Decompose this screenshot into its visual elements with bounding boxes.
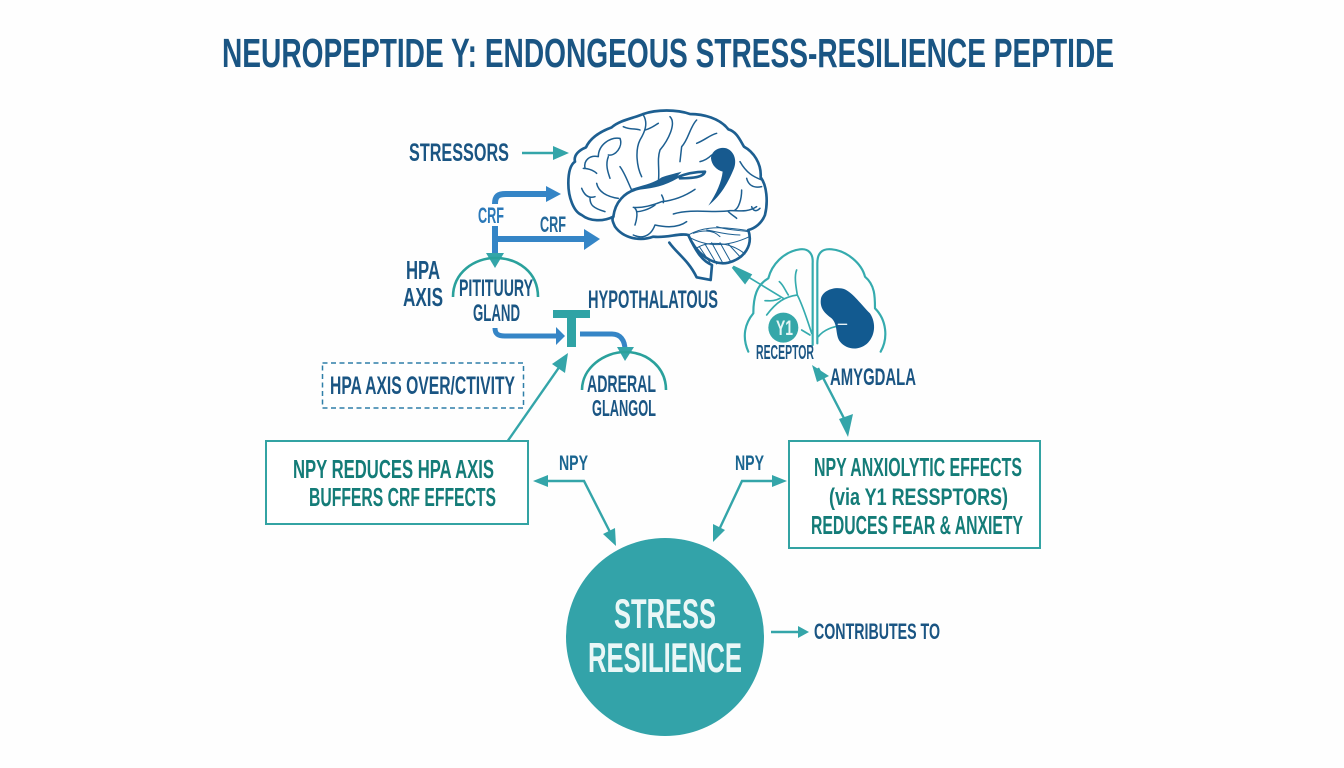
arrow: CRF upper branch (495, 186, 561, 204)
adrenal gland: ADRERAL (587, 371, 656, 398)
panel: NPY anxiolytic effects: (via Y1 RESSPTORS) (829, 484, 1008, 511)
pituitary gland (453, 258, 538, 327)
brain outline (568, 110, 767, 263)
arrow: right double elbow (713, 475, 787, 542)
HPA axis label: AXIS (403, 282, 443, 312)
branches (765, 270, 847, 337)
icon: amygdala (745, 249, 885, 352)
label: contributes to: CONTRIBUTES TO (814, 619, 940, 644)
right hemisphere (817, 249, 885, 352)
adrenal gland (582, 352, 666, 421)
panel: NPY reduces HPA axis: NPY REDUCES HPA AXIS (293, 454, 494, 484)
panel: NPY reduces HPA axis (266, 441, 528, 524)
arrow: contributes to (771, 626, 809, 638)
label: CRF left: CRF (478, 203, 504, 228)
arrow: stressors to brain (522, 146, 569, 160)
panel: NPY anxiolytic effects (789, 441, 1040, 548)
panel: NPY reduces HPA axis: BUFFERS CRF EFFECTS (309, 482, 496, 512)
arrow: left double elbow (533, 475, 616, 546)
panel: NPY anxiolytic effects: REDUCES FEAR & ANXIETY (811, 510, 1023, 540)
label: NPY right: NPY (735, 452, 764, 475)
inhibition T symbol (553, 310, 590, 347)
cerebellum folds (688, 227, 749, 264)
gyri (582, 115, 762, 237)
stressors label: STRESSORS (409, 139, 509, 167)
callout: HPA axis overactivity: HPA AXIS OVER/CTIVITY (330, 372, 515, 400)
dark fissure (630, 172, 682, 189)
arrow: pituitary to inhibition (495, 327, 565, 345)
Y1 circle (768, 313, 798, 343)
panel: NPY anxiolytic effects: NPY ANXIOLYTIC EFFECTS (814, 452, 1022, 482)
temporal lobe (613, 172, 705, 217)
label: NPY left: NPY (559, 452, 588, 475)
arrow: CRF lower branch and down to pituitary (486, 226, 600, 268)
HPA axis label: HPA (406, 255, 440, 285)
amygdala label: AMYGDALA (830, 364, 916, 391)
arrow: amygdala to brain (733, 267, 750, 282)
arrow: NPY box to T (507, 353, 568, 442)
arrow: amygdala to NPY box (812, 365, 853, 437)
HPA axis label (403, 255, 443, 312)
circle: stress resilience (566, 538, 764, 736)
receptor label: RECEPTOR (756, 342, 814, 364)
pituitary gland: PITITUURY (459, 275, 533, 302)
icon: brain (568, 110, 767, 280)
label: CRF right: CRF (540, 212, 566, 237)
dark amygdala (821, 288, 874, 349)
Y1 label: Y1 (776, 317, 793, 340)
hypothalamus label: HYPOTHALATOUS (588, 286, 718, 314)
dark comma structure (708, 148, 735, 206)
pituitary gland: GLAND (473, 300, 520, 327)
left hemisphere (745, 249, 813, 352)
arrow: T to adrenal (580, 334, 634, 361)
circle: stress resilience: STRESS (614, 590, 716, 637)
callout: HPA axis overactivity (322, 363, 524, 408)
adrenal gland: GLANGOL (592, 395, 656, 421)
brainstem (669, 235, 712, 280)
circle: stress resilience: RESILIENCE (588, 634, 742, 681)
